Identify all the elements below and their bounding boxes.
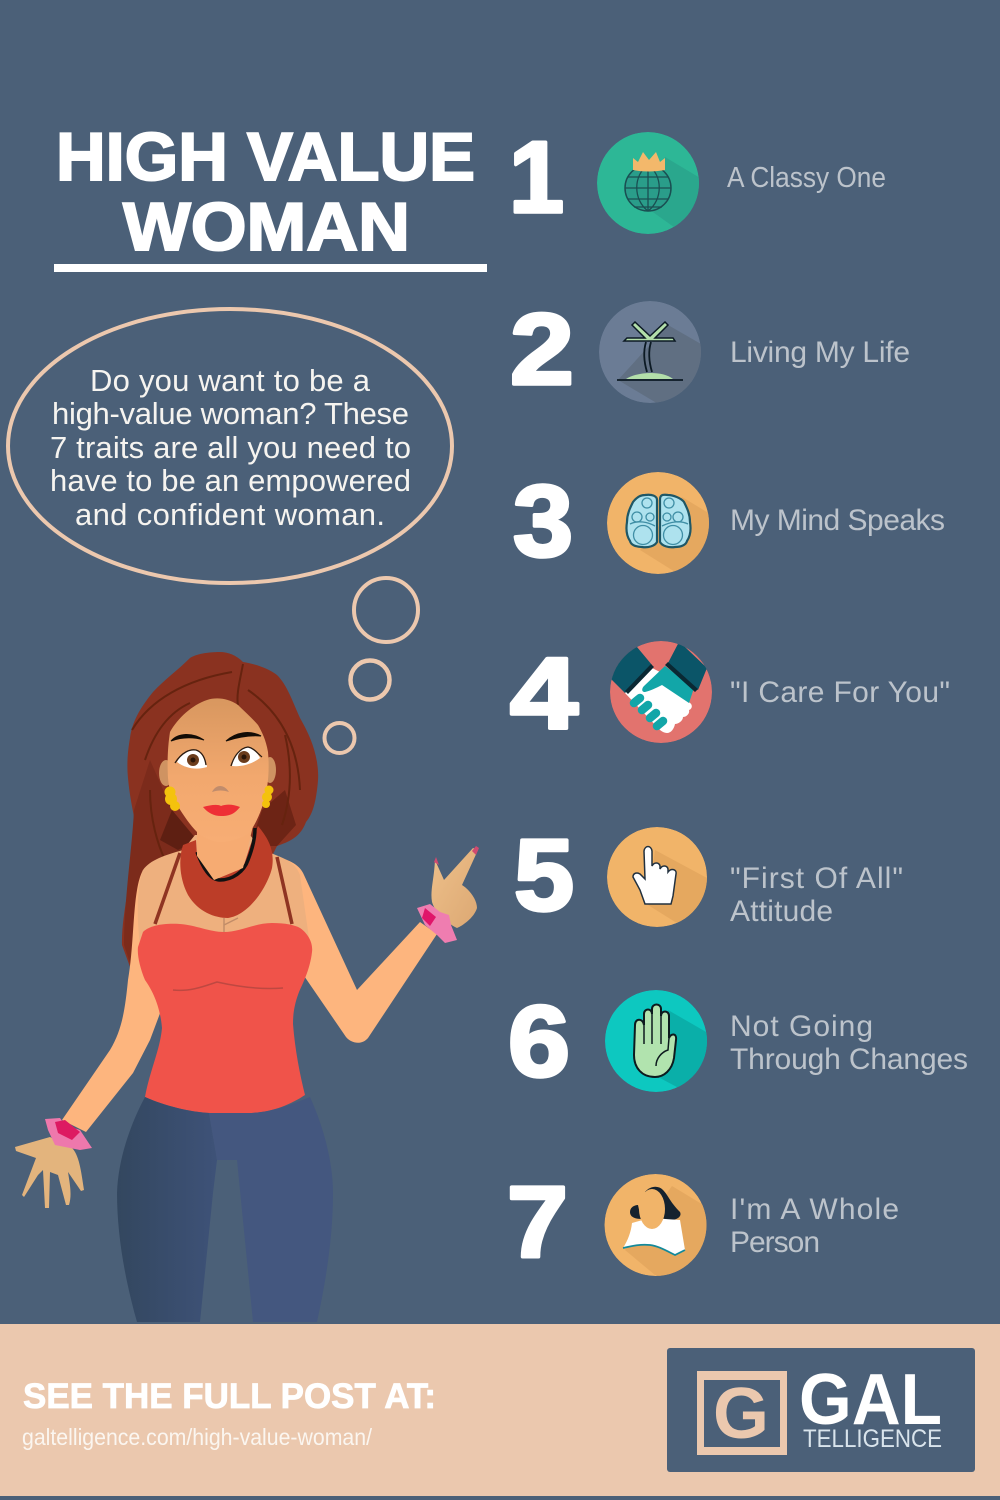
GALtelligence logo: G (713, 1374, 769, 1454)
trait 6 icon: raised hand (605, 990, 707, 1092)
neck (197, 826, 253, 880)
back hair (122, 652, 318, 975)
trait 6 label: Through Changes (730, 1043, 968, 1076)
number 5: 5 (514, 820, 574, 932)
trait 7 label: I'm A Whole (730, 1193, 899, 1226)
brows (171, 733, 261, 741)
title: WOMAN (123, 189, 410, 265)
ears (159, 760, 173, 786)
earrings (164, 786, 274, 811)
top (138, 923, 312, 1113)
footer url: galtelligence.com/high-value-woman/ (22, 1424, 373, 1450)
nose and lips (212, 786, 229, 792)
right hand (431, 848, 478, 928)
trait 4 icon: handshake (610, 641, 712, 743)
number 7: 7 (507, 1167, 568, 1279)
number 2: 2 (510, 294, 574, 406)
hair strands (132, 664, 300, 860)
thought bubble with intro text: and confident woman. (75, 497, 385, 532)
right scrunchie (417, 904, 457, 943)
trait 5 icon: pointing hand (607, 827, 707, 927)
trait 2 label: Living My Life (730, 336, 910, 369)
straps (155, 853, 292, 924)
woman illustration (15, 652, 479, 1322)
trait 3 label: My Mind Speaks (730, 504, 945, 537)
thought bubble with intro text: have to be an empowered (50, 463, 411, 498)
trait 1 icon: crowned globe (597, 132, 699, 234)
eyes (177, 750, 207, 769)
GALtelligence logo: GAL (799, 1360, 942, 1440)
left hand (15, 1137, 84, 1208)
thought bubble with intro text: Do you want to be a (90, 363, 371, 398)
trait 5 label (730, 862, 903, 928)
right arm (277, 857, 437, 1043)
trait 3 icon: brain (607, 472, 709, 574)
trait 5 label: "First Of All" (730, 862, 903, 895)
number 6: 6 (508, 986, 570, 1098)
face (168, 698, 269, 842)
number 3: 3 (513, 466, 573, 578)
trait 4 label: "I Care For You" (730, 676, 950, 709)
trait 2 icon: palm island (599, 301, 701, 403)
thought bubble with intro text: 7 traits are all you need to (50, 430, 411, 465)
trait 7 label (730, 1193, 899, 1259)
trait 1 label: A Classy One (727, 162, 886, 194)
GALtelligence logo: TELLIGENCE (803, 1425, 942, 1453)
trait 6 label (730, 1010, 968, 1076)
thought bubble with intro text (8, 309, 452, 583)
thought bubble with intro text: high-value woman? These (52, 396, 409, 431)
trait 5 label: Attitude (730, 895, 833, 928)
jeans (117, 1097, 217, 1322)
left arm (62, 870, 165, 1132)
title: HIGH VALUE (56, 119, 475, 195)
trait 7 icon: person reading (604, 1174, 706, 1276)
footer band (0, 1324, 1000, 1496)
left scrunchie (45, 1118, 92, 1150)
number 4: 4 (510, 638, 578, 750)
torso (138, 835, 310, 945)
trait 7 label: Person (730, 1226, 820, 1259)
footer call to action: SEE THE FULL POST AT: (23, 1377, 436, 1416)
GALtelligence logo (667, 1348, 975, 1472)
thought bubble trail (324, 578, 418, 753)
trait 6 label: Not Going (730, 1010, 873, 1043)
number 1: 1 (509, 122, 564, 234)
scarf (180, 826, 273, 918)
title (54, 119, 487, 272)
